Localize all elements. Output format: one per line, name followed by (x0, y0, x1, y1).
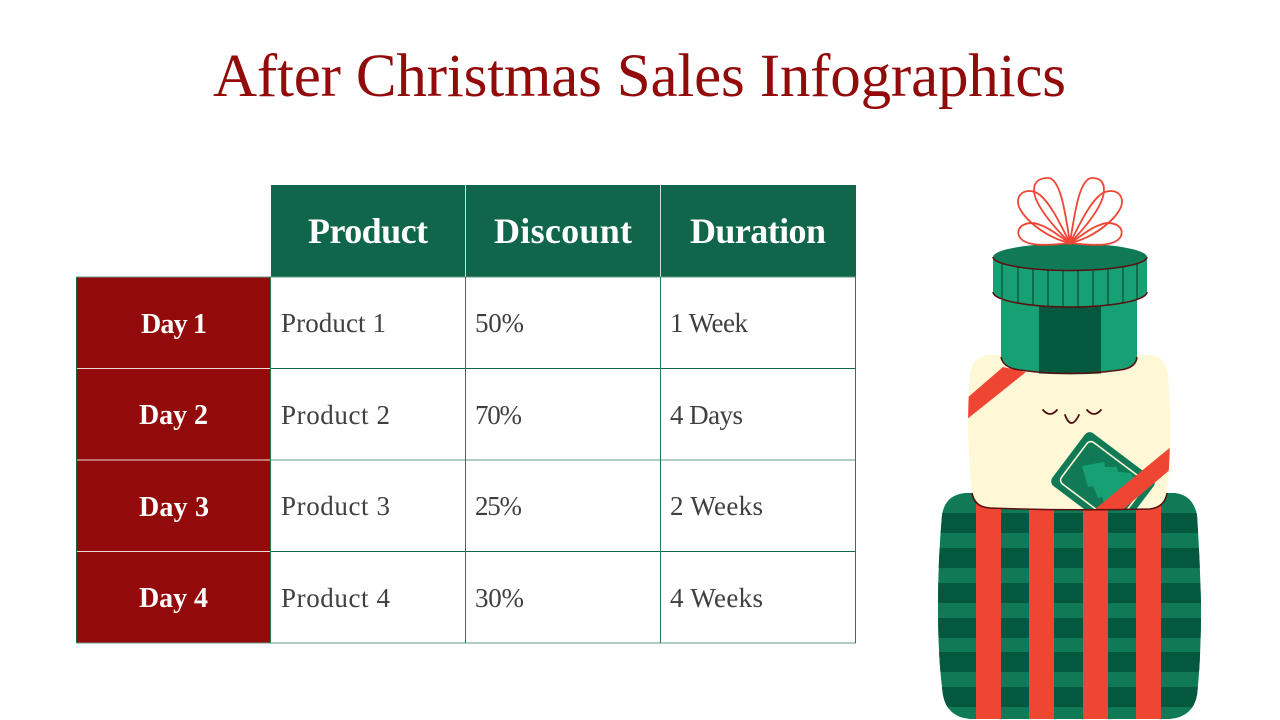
row labels column: Day 1 (141, 309, 207, 340)
box bottom outline (972, 493, 1167, 510)
row: day 4: Product 4 (281, 583, 390, 613)
row: day 4: 30% (475, 583, 524, 613)
row: day 1 (281, 308, 748, 338)
icon: stacked gift boxes (936, 178, 1204, 720)
row labels column: Day 2 (139, 400, 208, 431)
title: After Christmas Sales Infographics (213, 43, 1066, 110)
row: day 3: Product 3 (281, 491, 390, 521)
row: day 3 (281, 491, 763, 521)
table header row: Duration (690, 211, 826, 251)
bow (1018, 178, 1122, 245)
row: day 4: 4 Weeks (670, 583, 763, 613)
table header row (271, 185, 856, 277)
table body grid (270, 277, 856, 643)
top gift box (993, 244, 1147, 374)
table header row: Discount (494, 211, 632, 251)
row: day 1: 50% (475, 308, 524, 338)
row: day 2 (281, 400, 743, 430)
middle gift box (968, 355, 1170, 510)
bottom gift box (936, 490, 1204, 720)
row labels column: Day 4 (139, 583, 208, 614)
ribbon diagonals (966, 367, 1026, 420)
row: day 3: 25% (475, 491, 522, 521)
row: day 2: Product 2 (281, 400, 390, 430)
row: day 4 (281, 583, 763, 613)
row: day 2: 70% (475, 400, 522, 430)
row labels column: Day 3 (139, 492, 209, 523)
row labels column (76, 277, 271, 643)
table (76, 185, 856, 643)
lid (993, 257, 1147, 307)
row: day 1: Product 1 (281, 308, 386, 338)
row: day 2: 4 Days (670, 400, 743, 430)
table header row: Product (308, 211, 428, 251)
face (1043, 410, 1101, 423)
row: day 1: 1 Week (670, 308, 748, 338)
gift tag (1051, 432, 1155, 509)
row: day 3: 2 Weeks (670, 491, 763, 521)
